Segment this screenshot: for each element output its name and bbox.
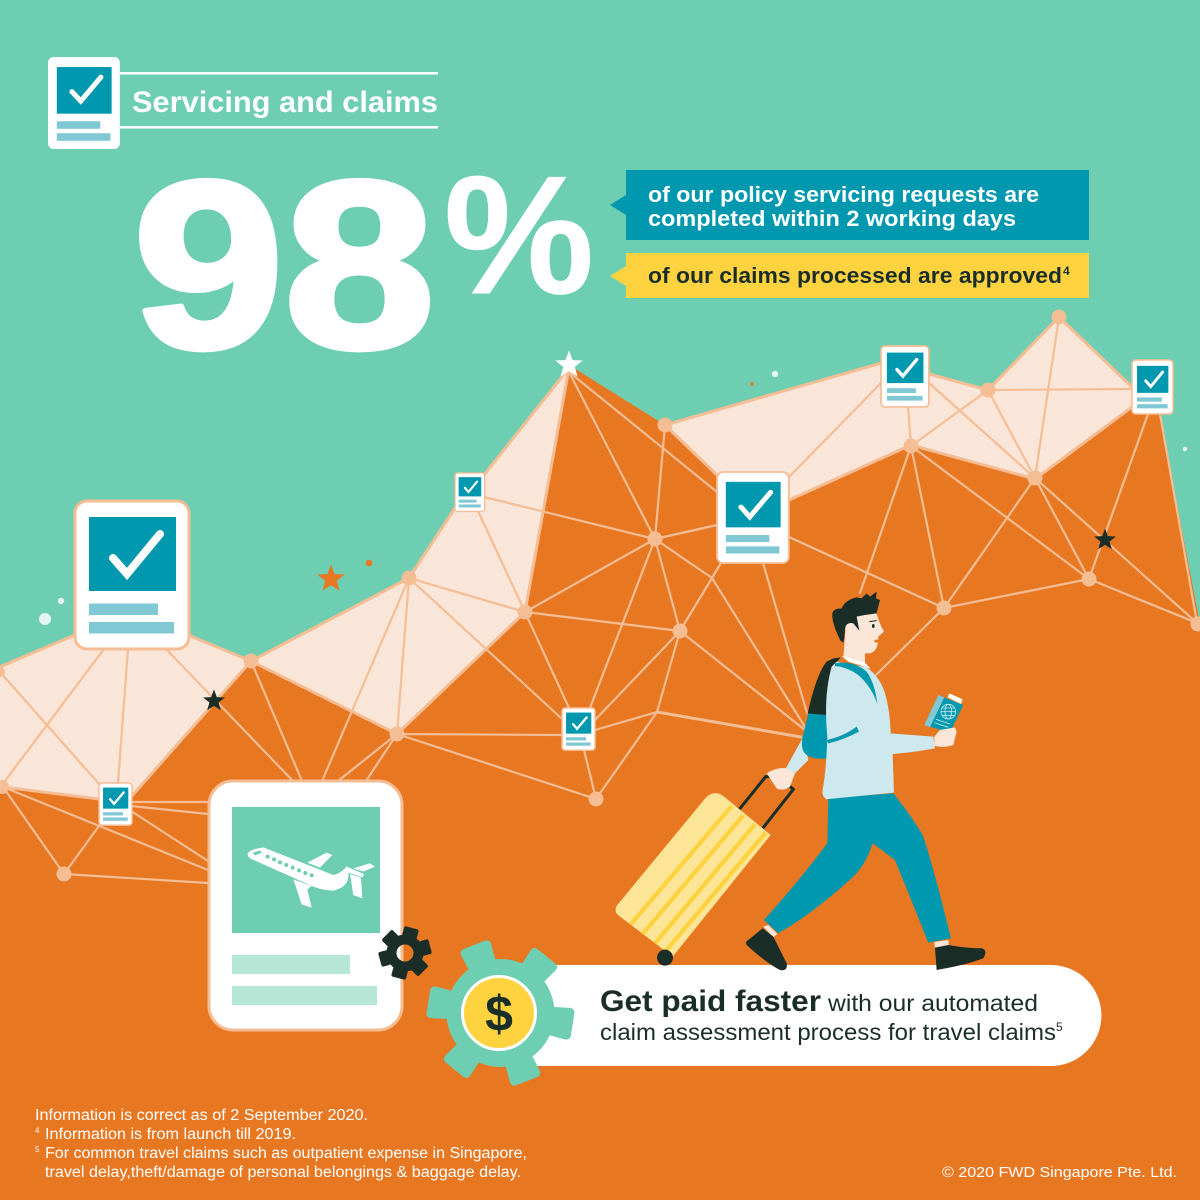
icon: airplane (248, 847, 375, 908)
callout pill: get paid faster: claim assessment process for travel claims (600, 1019, 1056, 1045)
plane card (209, 781, 402, 1030)
pale network area: right (665, 317, 1135, 500)
callout: claims approved: of our claims processed are approved (648, 263, 1062, 288)
star: dark left (203, 690, 225, 710)
star: white peak (555, 350, 583, 377)
header icon: checklist document (48, 57, 120, 149)
network links (0, 317, 1197, 883)
orange mountain silhouette (0, 317, 1200, 1200)
star: dark right (1094, 528, 1116, 549)
callout: policy servicing requests: of our policy servicing requests are (648, 182, 1039, 207)
callout pill: get paid faster (530, 965, 1101, 1066)
footnotes: travel delay,theft/damage of personal belongings & baggage delay. (45, 1164, 521, 1181)
document card: small upper (455, 473, 485, 511)
footnotes: 5 (35, 1145, 40, 1154)
document card: far right (1132, 360, 1173, 414)
footnotes: Information is correct as of 2 September 2020. (35, 1107, 368, 1124)
callout pill: get paid faster: Get paid faster (600, 985, 821, 1018)
big statistic: 98%: 98 (133, 133, 435, 398)
back arm and hand (767, 737, 808, 790)
callout: claims approved: 4 (1063, 264, 1070, 278)
suitcase handle (739, 777, 793, 828)
footnotes: 4 (35, 1126, 40, 1135)
callout pill: get paid faster: with our automated (827, 990, 1038, 1016)
heading: servicing and claims: Servicing and claims (132, 86, 438, 119)
trousers (764, 793, 951, 943)
document card: top right (881, 346, 929, 407)
suitcase (616, 793, 771, 966)
pale network area: left (0, 635, 251, 799)
footnotes (35, 1107, 527, 1181)
backpack (802, 657, 841, 759)
document card: centre large (717, 472, 789, 563)
chart: mountain network (0, 310, 1200, 1200)
icon: small dark gear (378, 926, 432, 980)
callout: claims approved (610, 253, 1089, 298)
footnotes: Information is from launch till 2019. (45, 1126, 296, 1143)
callout: policy servicing requests (610, 170, 1089, 240)
callout pill: get paid faster: 5 (1056, 1020, 1063, 1034)
passport (924, 693, 963, 733)
icon: dollar gear (426, 939, 575, 1087)
pale network area: middle (251, 368, 569, 734)
jacket (822, 662, 935, 799)
icon: dollar gear: $ (485, 986, 513, 1042)
big statistic: 98%: % (444, 141, 594, 329)
illustration: traveller with suitcase (616, 592, 985, 970)
big statistic: 98% (133, 133, 594, 398)
front hand (934, 727, 957, 747)
copyright: © 2020 FWD Singapore Pte. Ltd. (942, 1165, 1177, 1181)
document card: small lower middle (562, 708, 595, 750)
document card: large left (75, 501, 189, 649)
head (832, 592, 884, 669)
footnotes: For common travel claims such as outpatient expense in Singapore, (45, 1145, 527, 1162)
network nodes (0, 310, 1200, 882)
decorative dots (39, 371, 1187, 625)
socks and shoes (746, 925, 985, 970)
callout: policy servicing requests: completed within 2 working days (648, 206, 1016, 231)
backpack straps (827, 663, 877, 743)
document card: small lower left (99, 783, 132, 825)
star: orange (317, 564, 345, 591)
